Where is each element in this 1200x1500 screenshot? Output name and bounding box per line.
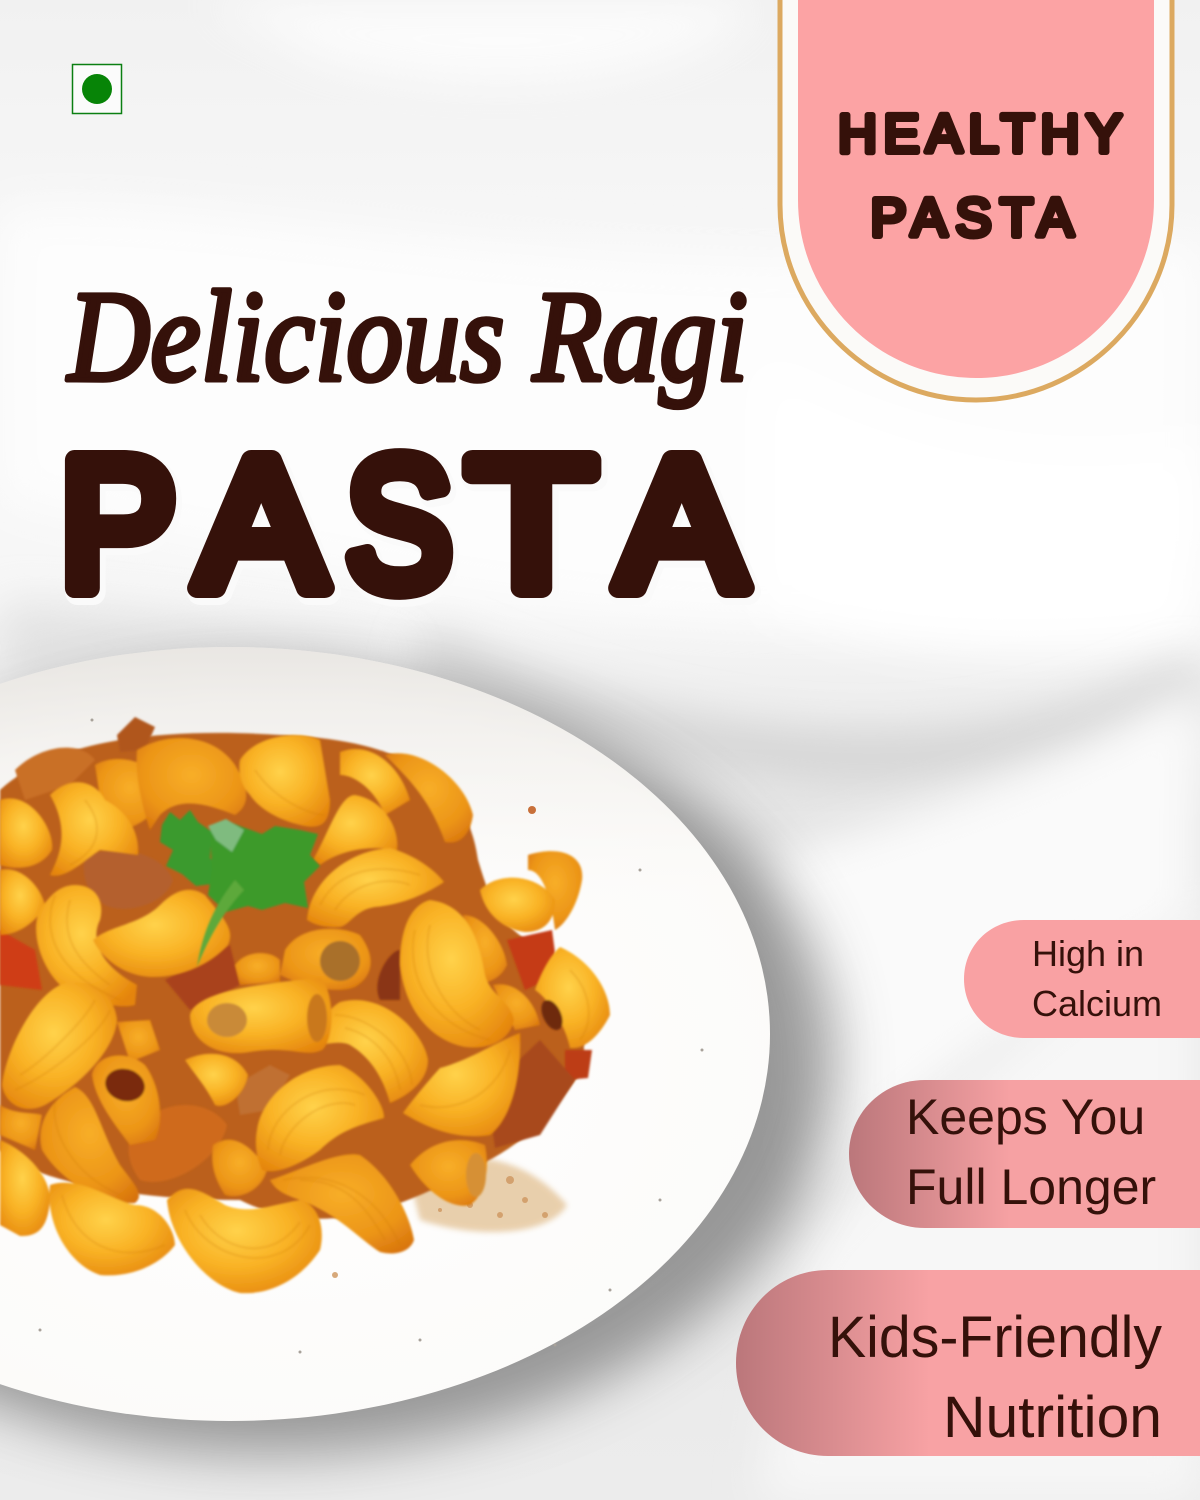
title: PASTA: S (349, 425, 455, 632)
title: PASTA: T (468, 421, 595, 628)
title: PASTA: A (621, 425, 748, 632)
title: PASTA (60, 421, 748, 632)
badge text (838, 104, 1122, 248)
title: PASTA: P (63, 425, 179, 632)
cilantro garnish (160, 810, 320, 967)
benefit pill: high in calcium (964, 920, 1200, 1038)
badge text: PASTA (870, 188, 1074, 248)
benefit pill: kids-friendly nutrition (736, 1270, 1200, 1456)
title: Delicious Ragi: Delicious Ragi (66, 265, 748, 409)
sauce base (0, 717, 592, 1278)
plate shadow (0, 670, 835, 1454)
title: PASTA: T (471, 425, 598, 632)
icon: vegetarian mark (72, 64, 122, 114)
pasta ridges (15, 770, 589, 1258)
pill text (906, 1089, 1156, 1215)
badge: healthy pasta (780, 0, 1172, 400)
benefit pill: keeps you full longer (849, 1080, 1200, 1228)
title: PASTA: S (346, 421, 452, 628)
pill text (828, 1305, 1162, 1450)
pasta pieces (0, 735, 610, 1293)
pill text: Keeps You (906, 1089, 1145, 1145)
plate (0, 647, 770, 1421)
pill text: High in (1032, 933, 1144, 974)
pill text: Full Longer (906, 1159, 1156, 1215)
pill text: Kids-Friendly (828, 1305, 1162, 1370)
pill text (1032, 933, 1162, 1024)
title: PASTA: P (60, 421, 176, 628)
pill text: Calcium (1032, 983, 1162, 1024)
title: PASTA: A (618, 421, 745, 628)
badge text: HEALTHY (838, 104, 1122, 164)
food: macaroni pasta with sauce (0, 717, 610, 1293)
title: PASTA: A (197, 421, 325, 628)
pill text: Nutrition (943, 1385, 1162, 1450)
title: PASTA: A (200, 425, 328, 632)
